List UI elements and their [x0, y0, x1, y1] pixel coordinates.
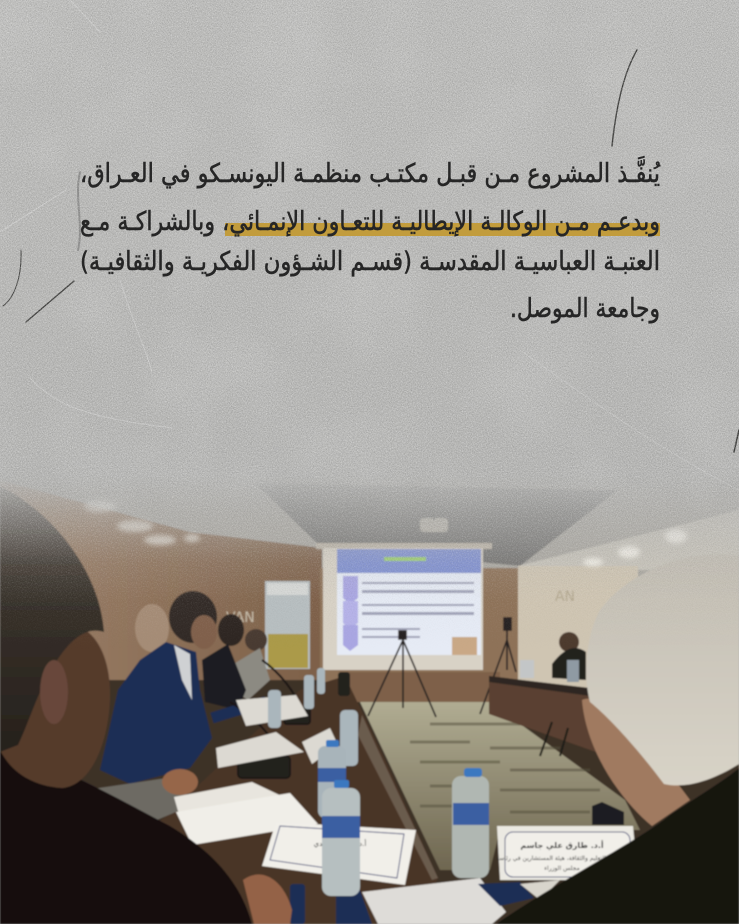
wood wall left — [10, 488, 322, 681]
photo: meeting room — [0, 450, 739, 924]
hair right man — [586, 554, 739, 785]
bottle right — [452, 776, 489, 878]
ear left man — [40, 660, 68, 724]
wall logo: AN — [555, 589, 575, 605]
grey sleeve — [96, 778, 186, 821]
ceiling lights — [84, 500, 687, 566]
wood wall behind screen — [320, 568, 519, 683]
room shadow base — [80, 679, 739, 924]
bottle front — [322, 788, 360, 896]
woman with scarf — [135, 604, 169, 652]
name card right — [496, 826, 638, 880]
name card right: أ.د. طارق علي جاسم — [520, 840, 604, 850]
line 1: يُنفَّـذ المشروع مـن قبـل مكتـب منظمـة اليونسـكو في العـراق، — [80, 155, 661, 189]
carpet floor — [360, 702, 640, 870]
bottle back — [318, 746, 346, 818]
line 2: وبدعـم مـن الوكالـة الإيطاليـة للتعـاون الإنمـائي، وبالشراكـة مـع — [80, 207, 660, 237]
man in grey shirt — [232, 629, 270, 700]
right foreground man — [496, 554, 739, 924]
face right man — [582, 699, 690, 826]
name card right: مجلس الوزراء — [544, 865, 580, 872]
paper cracks — [0, 0, 739, 490]
bottom documents — [290, 878, 560, 924]
man in blue suit — [100, 591, 266, 784]
hand on table — [162, 769, 198, 795]
banner — [265, 581, 310, 669]
suit left man — [0, 748, 252, 924]
presenter — [520, 632, 586, 682]
hair left man — [0, 486, 104, 752]
dark case right — [592, 802, 624, 825]
name card right: رئيس مكتب التعليم والثقافة، هيئة المستشارين في رئاسة — [496, 855, 638, 862]
left foreground man — [0, 486, 292, 924]
yellow highlight — [225, 223, 660, 236]
bottle small row — [268, 668, 358, 766]
centre table — [140, 676, 438, 924]
table edge highlight — [358, 715, 438, 880]
document stack — [174, 782, 318, 845]
projection screen — [316, 543, 492, 670]
side table — [489, 676, 600, 756]
name card centre: أ.د. قصي الأحمدي — [314, 839, 366, 848]
microphones — [230, 660, 310, 778]
suit right man — [496, 768, 739, 924]
wall logo left: VAN — [226, 610, 255, 626]
line 4: وجامعة الموصل. — [510, 294, 660, 324]
line 3: العتبـة العباسيـة المقدسـة (قسـم الشـؤون الفكريـة والثقافيـة) — [80, 247, 660, 277]
tripods — [368, 618, 516, 717]
face left man — [0, 625, 110, 788]
man in black suit — [202, 614, 246, 710]
hand left man — [243, 875, 292, 924]
name card centre — [262, 822, 416, 885]
water bottles — [268, 668, 489, 896]
table papers upper — [216, 695, 338, 768]
ceiling — [122, 485, 738, 576]
cream wall right — [518, 566, 638, 688]
body paragraph — [80, 155, 661, 324]
ceiling projector — [420, 518, 448, 532]
carpet stripes — [410, 724, 600, 812]
wainscot shelf — [340, 672, 500, 702]
